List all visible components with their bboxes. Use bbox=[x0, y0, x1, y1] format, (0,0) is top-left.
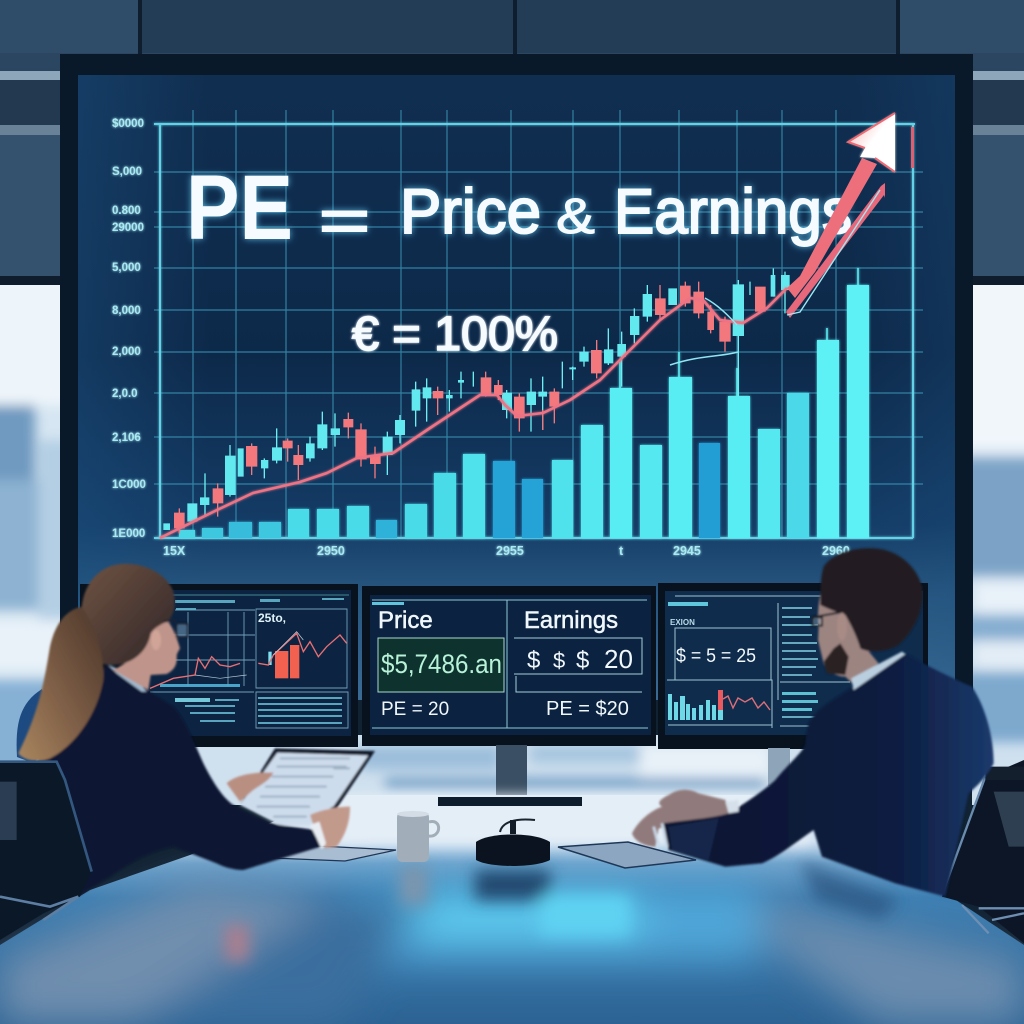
title: PE = Price & Earnings: & bbox=[556, 188, 595, 244]
man bbox=[632, 548, 994, 897]
monitor stands bbox=[496, 745, 790, 797]
man's beard bbox=[824, 643, 849, 675]
earnings value box: $ bbox=[553, 648, 565, 673]
woman's hair bbox=[82, 564, 175, 665]
x axis labels: 2955 bbox=[496, 544, 524, 558]
price value box bbox=[378, 638, 504, 692]
left chair bbox=[0, 762, 92, 940]
monitor 1 label: 25to, bbox=[258, 611, 286, 625]
candlesticks left half bbox=[163, 372, 512, 533]
woman bbox=[18, 564, 375, 897]
woman's left hand bbox=[227, 773, 273, 802]
woman's face and neck bbox=[113, 620, 180, 690]
y axis labels: S,000 bbox=[112, 166, 142, 178]
woman's suit bbox=[30, 665, 321, 897]
monitor stand base bbox=[438, 797, 582, 806]
trend arrow bbox=[670, 113, 914, 365]
price value box: $5,7486.an bbox=[381, 649, 502, 679]
monitor 3 label: EXION bbox=[670, 618, 695, 627]
man's face bbox=[818, 587, 879, 683]
x axis labels bbox=[163, 544, 850, 558]
x axis labels: t bbox=[619, 544, 624, 558]
title: PE = Price & Earnings: = bbox=[319, 187, 370, 254]
y axis labels: $0000 bbox=[112, 118, 144, 130]
man's hands bbox=[632, 790, 732, 847]
y axis labels: 2,000 bbox=[112, 346, 141, 358]
price trend line bbox=[160, 288, 787, 538]
woman's glasses bbox=[163, 620, 187, 637]
monitor 2: price and earnings bbox=[362, 586, 656, 746]
woman's tablet bbox=[240, 748, 375, 825]
woman's collar bbox=[108, 665, 147, 692]
title: PE = Price & Earnings: PE bbox=[186, 157, 293, 259]
man's folder bbox=[558, 842, 696, 868]
woman's cuff bbox=[310, 822, 326, 849]
man's glasses bbox=[812, 612, 840, 626]
woman's ponytail bbox=[18, 607, 104, 761]
y axis labels: 8,000 bbox=[112, 305, 141, 317]
y axis labels: 1E000 bbox=[112, 528, 145, 540]
y axis labels: 0.800 bbox=[112, 205, 141, 217]
candlesticks right half bbox=[514, 268, 790, 432]
right window city view bbox=[972, 285, 1024, 805]
y axis labels: 5,000 bbox=[112, 262, 141, 274]
title: PE = Price & Earnings: Price bbox=[400, 177, 541, 247]
PE right value: PE = $20 bbox=[546, 698, 629, 720]
earnings value box bbox=[514, 638, 642, 692]
table reflections bbox=[0, 880, 1024, 1024]
conference table bbox=[0, 795, 1024, 1024]
monitor 1 line charts bbox=[150, 632, 347, 688]
y axis labels: 1C000 bbox=[112, 479, 146, 491]
monitor 3 bar chart bbox=[668, 690, 723, 720]
PE left value: PE = 20 bbox=[381, 699, 449, 720]
earnings value box: 20 bbox=[604, 644, 633, 674]
woman's notebook bbox=[180, 845, 396, 861]
monitor 3 bbox=[658, 583, 928, 749]
title: PE = Price & Earnings: Earnings bbox=[614, 177, 852, 247]
chair behind woman bbox=[17, 689, 60, 763]
man's ear bbox=[837, 613, 847, 641]
y axis labels bbox=[112, 118, 146, 540]
monitor 1 bbox=[80, 584, 358, 747]
woman's ear bbox=[151, 630, 161, 650]
coffee cup bbox=[397, 811, 439, 862]
man's collar bbox=[851, 652, 905, 690]
man's hair bbox=[820, 548, 923, 651]
monitor 3 red line bbox=[723, 696, 770, 710]
y axis labels: 29000 bbox=[112, 222, 144, 234]
monitor 1 text lines bbox=[160, 598, 344, 724]
x axis labels: 2950 bbox=[317, 544, 345, 558]
left window city view bbox=[0, 285, 60, 760]
x axis labels: 15X bbox=[163, 544, 186, 558]
y axis labels: 2,0.0 bbox=[112, 388, 138, 400]
earnings value box: $ bbox=[576, 647, 589, 674]
x axis labels: 2945 bbox=[673, 544, 701, 558]
title: PE = Price & Earnings bbox=[186, 157, 852, 259]
chart axes bbox=[154, 124, 915, 538]
monitor 3 data rows bbox=[782, 607, 818, 718]
price heading: Price bbox=[378, 607, 433, 634]
woman's right hand bbox=[310, 807, 350, 848]
main chart grid bbox=[154, 110, 923, 538]
man's sleeve stripes bbox=[654, 823, 667, 847]
monitor 3 formula: $ = 5 = 25 bbox=[676, 646, 756, 667]
background wall bbox=[0, 0, 1024, 290]
lower window behind monitors bbox=[190, 735, 810, 805]
volume bars bbox=[179, 268, 869, 538]
right chair bbox=[942, 760, 1024, 943]
y axis labels: 2,106 bbox=[112, 432, 141, 444]
wall display screen bbox=[78, 75, 955, 700]
wall display frame bbox=[60, 54, 973, 700]
earnings heading: Earnings bbox=[524, 607, 618, 634]
man's suit bbox=[664, 653, 994, 897]
subtitle: euro equals 100 percent: € = 100% bbox=[352, 308, 558, 361]
x axis labels: 2960 bbox=[822, 544, 850, 558]
monitor 1 grid chart bbox=[150, 595, 349, 728]
conference speaker bbox=[476, 820, 550, 866]
earnings value box: $ bbox=[527, 647, 540, 674]
